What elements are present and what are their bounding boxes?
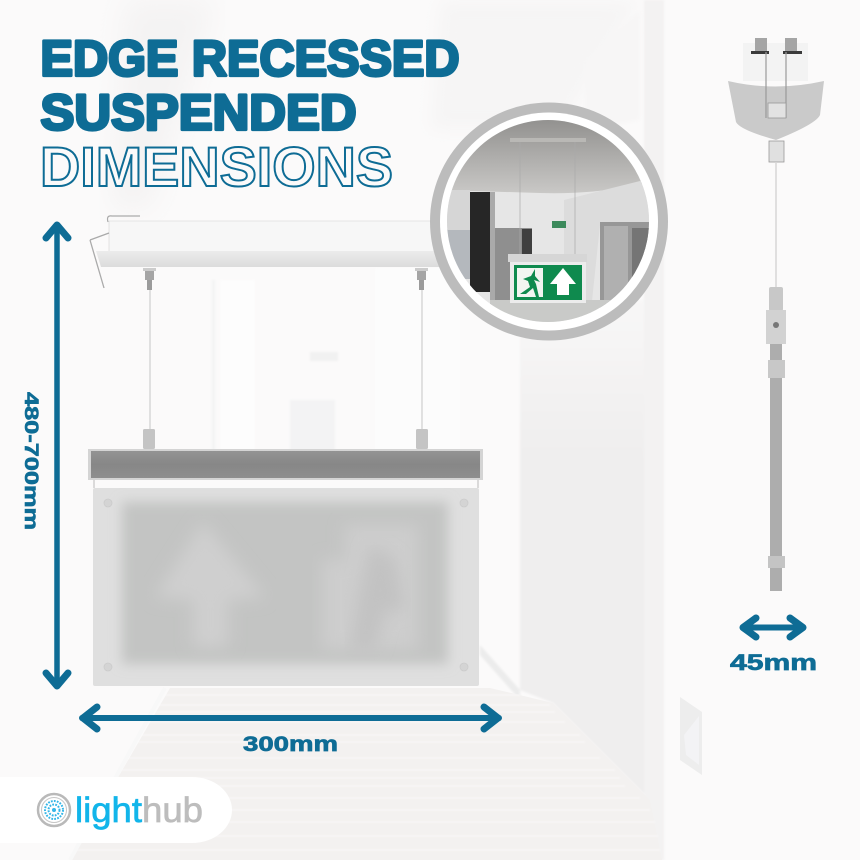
logo icon — [38, 794, 70, 826]
title: EDGE RECESSED — [40, 30, 460, 86]
sign connectors — [143, 429, 428, 449]
side view of fitting — [728, 38, 824, 591]
wire fixing right — [415, 268, 428, 290]
sign top bar — [88, 449, 483, 480]
recess body — [743, 43, 808, 81]
arrow: 45mm — [743, 618, 803, 637]
arrow: width — [82, 707, 499, 729]
corridor floor — [70, 688, 662, 860]
title: SUSPENDED — [40, 84, 356, 140]
ceiling mount rail — [90, 216, 440, 290]
mini exit sign — [508, 254, 587, 303]
suspension wires — [150, 290, 422, 430]
inset photo circle — [430, 102, 668, 340]
wire fixing left — [143, 268, 156, 290]
label: 45mm: 45mm — [730, 650, 817, 675]
title — [40, 30, 460, 198]
frosted panel — [93, 488, 479, 686]
clips — [751, 38, 802, 54]
arrow: height — [46, 225, 68, 686]
right wall column — [520, 300, 662, 840]
label: 480-700mm: 480-700mm — [20, 392, 41, 530]
title: DIMENSIONS — [40, 135, 393, 198]
suspended exit sign — [88, 429, 483, 686]
wall vent — [680, 697, 702, 775]
logo wordmark: lighthub — [75, 791, 203, 830]
label: 300mm: 300mm — [243, 733, 338, 756]
logo badge — [0, 777, 232, 843]
housing — [728, 81, 824, 140]
